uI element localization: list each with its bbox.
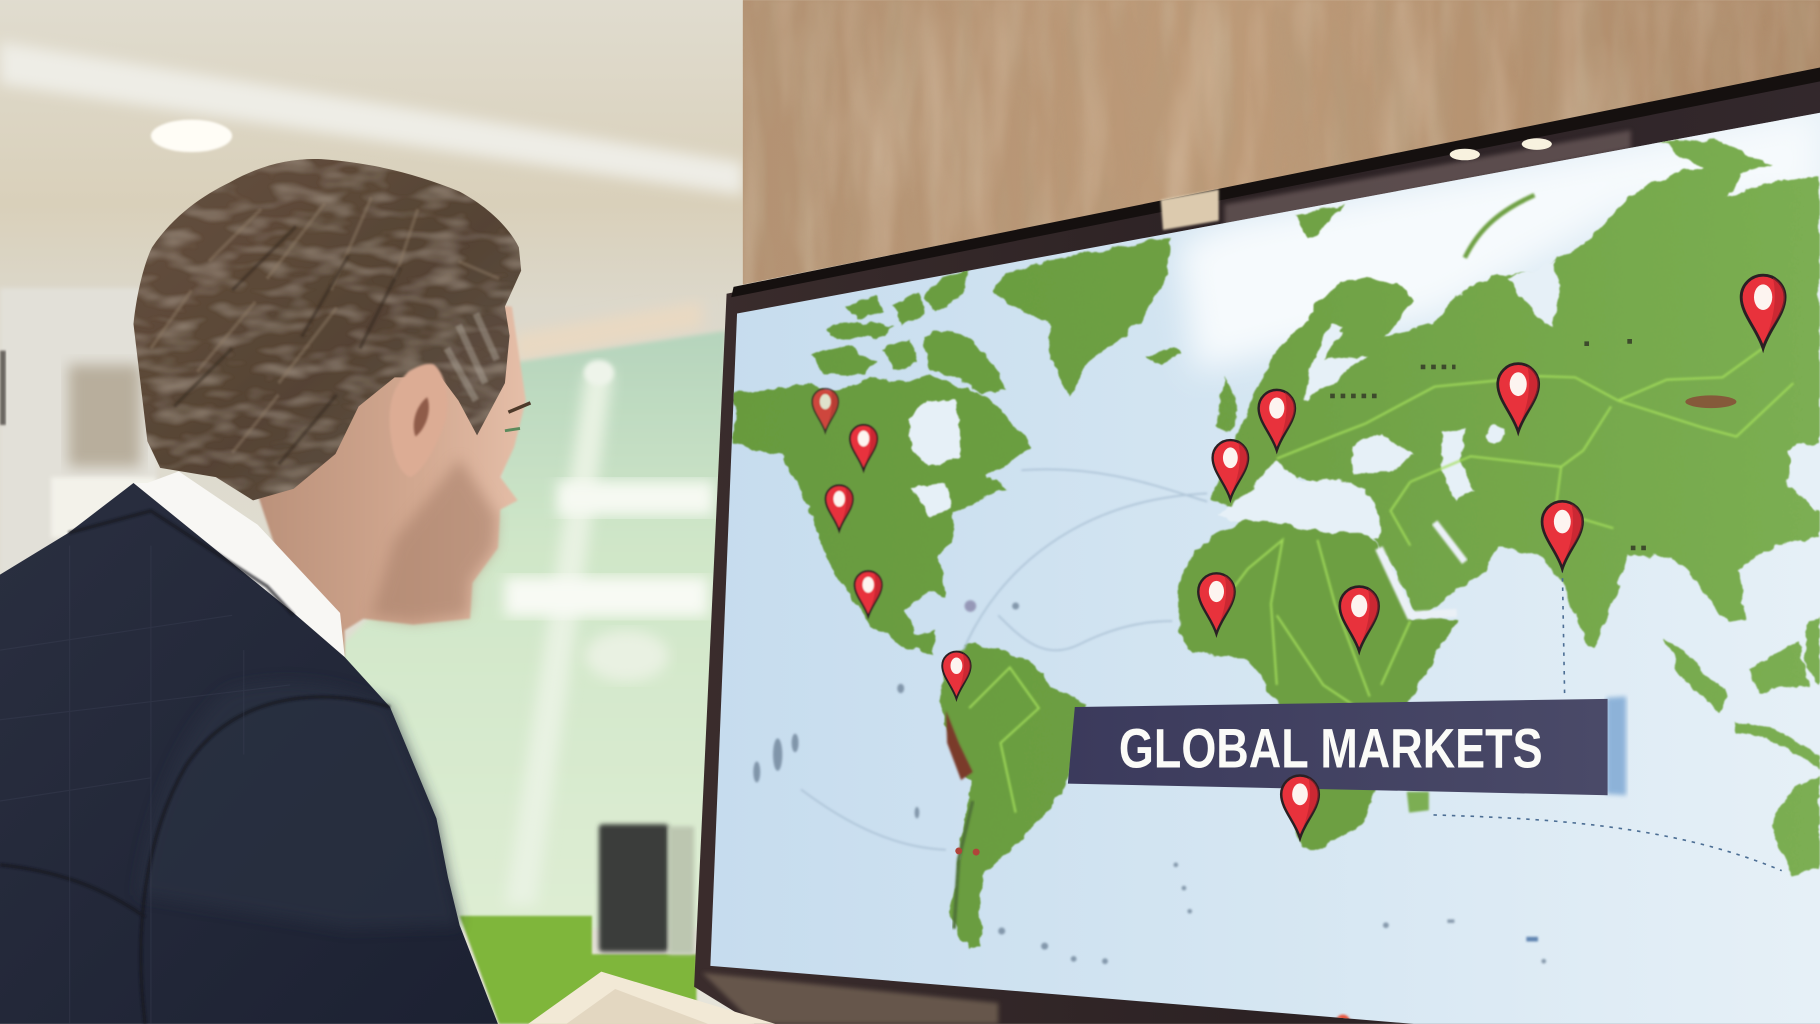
eye [505,428,520,431]
Madagascar [1407,792,1429,813]
shoulder highlight [138,682,460,929]
white shirt collar [133,471,345,657]
partial pin at bottom edge [1336,1015,1350,1024]
market pins [812,275,1785,699]
bezel light reflections [1450,138,1552,160]
hair [133,159,521,500]
frosted glass partition with green tint [337,331,725,929]
continent: Australia [1771,773,1820,876]
small dark map marks [1330,341,1648,548]
beard stubble [371,459,497,622]
continent: South America [939,642,1089,948]
Britain [1216,377,1240,432]
suit jacket [0,483,498,1024]
man in suit [0,159,775,1024]
hair strands [151,197,499,453]
open document [528,972,775,1024]
Global Markets banner [1068,697,1626,795]
pin overlapping banner [1281,775,1319,838]
Andes [946,710,973,780]
inland seas and coast water [909,261,1818,546]
Arctic islands [923,269,973,311]
monitor [694,67,1820,1024]
continent: Africa [1178,520,1457,849]
world map [734,110,1820,1024]
Red Sea and Gulf of Aden [1379,548,1457,615]
ceiling light [151,120,232,152]
banner title: GLOBAL MARKETS [1119,717,1543,779]
continent: Greenland [994,237,1169,397]
ocean dots [753,600,1546,964]
ear [390,364,447,477]
continent: Indonesia and Borneo [1664,640,1728,710]
green furniture and dark chair [460,824,696,1024]
shipping routes [801,469,1207,850]
Iceland and Svalbard [1148,346,1183,365]
green route lines [969,347,1793,813]
neck and face [255,302,526,657]
continent: Eurasia [1211,139,1820,650]
office background [0,0,743,1024]
brown lake [1685,395,1736,408]
monitor bezel [694,70,1820,1024]
jacket seams [0,511,390,1024]
textured wall panel [743,0,1820,290]
Novaya Zemlya arc [1465,195,1534,258]
screen [710,113,1820,1024]
continent: North America [734,374,1032,656]
